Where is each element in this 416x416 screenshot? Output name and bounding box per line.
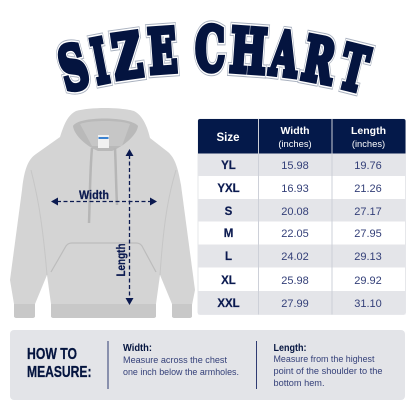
title: S xyxy=(51,30,96,105)
length instructions: point of the shoulder to the xyxy=(274,366,382,377)
row XXL xyxy=(217,298,382,310)
row XL xyxy=(221,275,382,287)
sleeve seams xyxy=(31,170,176,275)
how to measure heading: MEASURE: xyxy=(27,364,92,381)
title: S xyxy=(51,30,96,105)
how to measure panel xyxy=(10,330,405,400)
row L: L xyxy=(225,251,232,263)
table header: Length xyxy=(351,125,386,137)
title xyxy=(51,14,375,106)
pocket xyxy=(51,243,156,272)
title: E xyxy=(146,15,179,87)
row XL: 25.98 xyxy=(281,275,309,287)
size table xyxy=(198,119,406,314)
neck label xyxy=(98,135,109,148)
title: Z xyxy=(108,19,146,93)
row M: M xyxy=(224,228,233,240)
title: T xyxy=(333,31,375,106)
width instructions: one inch below the armholes. xyxy=(123,367,239,378)
row XL: XL xyxy=(221,275,236,287)
row M: 27.95 xyxy=(354,228,382,240)
table header: (inches) xyxy=(278,138,312,149)
title: C xyxy=(195,14,225,84)
title: H xyxy=(228,15,269,88)
hoodie illustration xyxy=(10,108,195,318)
length instructions: Measure from the highest xyxy=(274,354,375,365)
table header xyxy=(198,119,406,154)
row S: 27.17 xyxy=(354,206,382,218)
length instructions xyxy=(274,343,382,389)
row XXL: 27.99 xyxy=(281,298,309,310)
title: T xyxy=(333,31,375,106)
row YXL xyxy=(217,183,382,195)
table header: Size xyxy=(216,132,240,144)
title: A xyxy=(266,17,303,91)
width instructions: Measure across the chest xyxy=(123,355,227,366)
row YXL: 21.26 xyxy=(354,183,382,195)
title: R xyxy=(297,23,341,98)
row XXL: 31.10 xyxy=(354,298,382,310)
how to measure heading xyxy=(27,346,92,381)
title: S xyxy=(51,30,96,105)
title: E xyxy=(146,15,179,87)
title: R xyxy=(297,23,341,98)
how to measure heading: HOW TO xyxy=(27,346,77,363)
row L: 24.02 xyxy=(281,251,309,263)
title: C xyxy=(195,14,225,84)
row XL: 29.92 xyxy=(354,275,382,287)
row S xyxy=(225,206,382,218)
row L xyxy=(225,251,382,263)
length instructions: Length: xyxy=(274,343,306,354)
row YL xyxy=(221,160,382,172)
row M xyxy=(224,228,382,240)
row YL: 19.76 xyxy=(354,160,382,172)
table background xyxy=(198,119,406,314)
hem and cuff ribbing xyxy=(14,304,192,318)
row XXL: XXL xyxy=(217,298,240,310)
row YL: 15.98 xyxy=(281,160,309,172)
width instructions xyxy=(123,343,239,378)
table header: (inches) xyxy=(352,138,385,149)
width arrow xyxy=(51,198,157,206)
title: T xyxy=(333,31,375,106)
width label: Width xyxy=(79,188,109,202)
width instructions: Width: xyxy=(123,343,152,354)
title: A xyxy=(266,17,303,91)
hoodie silhouette xyxy=(10,108,195,318)
title: Z xyxy=(108,19,146,93)
row YL: YL xyxy=(221,160,236,172)
row YXL: YXL xyxy=(217,183,240,195)
table header: Width xyxy=(280,125,310,137)
title: Z xyxy=(108,19,146,93)
hood inner xyxy=(73,118,138,151)
zebra rows xyxy=(198,154,406,314)
title: H xyxy=(228,15,269,88)
title: I xyxy=(86,26,114,98)
title: I xyxy=(86,26,114,98)
title: C xyxy=(195,14,225,84)
length instructions: bottom hem. xyxy=(274,378,324,389)
title: E xyxy=(146,15,179,87)
title: R xyxy=(297,23,341,98)
title: A xyxy=(266,17,303,91)
row S: 20.08 xyxy=(281,206,309,218)
title: I xyxy=(86,26,114,98)
row YXL: 16.93 xyxy=(281,183,309,195)
length arrow xyxy=(126,149,134,305)
title: H xyxy=(228,15,269,88)
row L: 29.13 xyxy=(354,251,382,263)
row S: S xyxy=(225,206,233,218)
length label: Length xyxy=(114,244,128,276)
row M: 22.05 xyxy=(281,228,309,240)
drawstrings xyxy=(89,148,92,223)
